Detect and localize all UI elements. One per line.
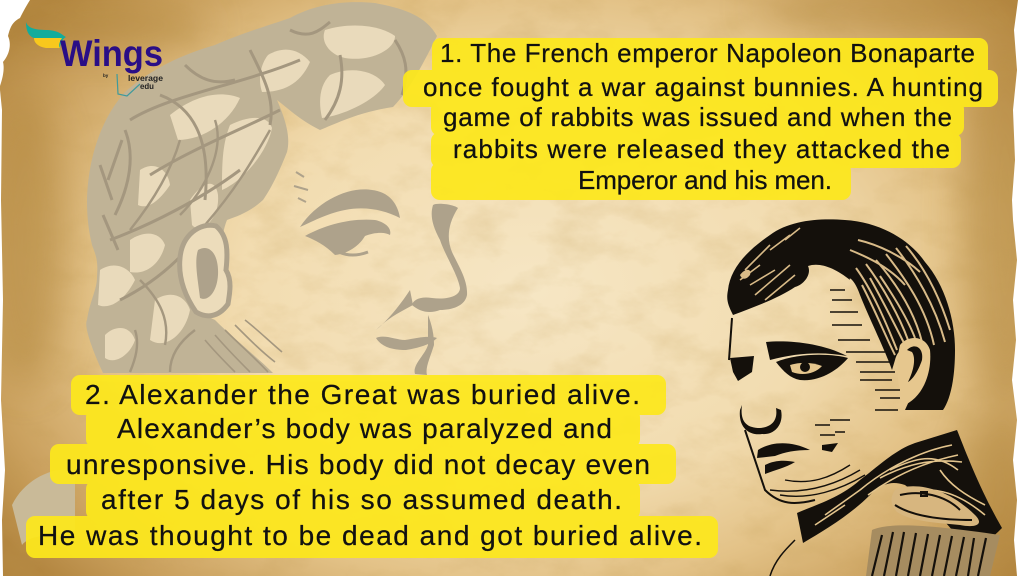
text: fact 2: He was thought to be dead and got buried alive. bbox=[38, 520, 702, 551]
far brow and eye bbox=[730, 356, 754, 381]
hair bbox=[727, 219, 955, 410]
yellow highlight: fact 1 bbox=[403, 38, 998, 200]
text: fact 2: unresponsive. His body did not decay even bbox=[66, 449, 650, 480]
brow bbox=[766, 341, 847, 360]
nose and mouth bbox=[376, 290, 437, 375]
hair and laurel wreath bbox=[86, 2, 437, 373]
nose bbox=[740, 405, 782, 434]
neck strands bbox=[12, 469, 75, 545]
logo: Wings by Leverage Edu bbox=[26, 22, 163, 96]
background portrait: Alexander the Great bbox=[12, 2, 467, 545]
Napoleon engraving bbox=[727, 219, 1002, 576]
forehead hatch bbox=[294, 172, 308, 202]
brow bbox=[300, 189, 400, 227]
text: fact 1: 1. The French emperor Napoleon Bonaparte bbox=[440, 38, 975, 68]
coat bbox=[866, 525, 1000, 576]
face profile bbox=[412, 204, 467, 312]
ear bbox=[898, 338, 930, 405]
face contour bbox=[729, 318, 815, 503]
text: fact 2: after 5 days of his so assumed death. bbox=[101, 484, 622, 515]
text: fact 2: Alexander’s body was paralyzed and bbox=[117, 413, 612, 444]
text: fact 1: once fought a war against bunnies. A hunting bbox=[423, 72, 983, 102]
logo: Wings by Leverage Edu: Wings bbox=[60, 33, 163, 74]
logo: Wings by Leverage Edu: leverage bbox=[128, 73, 163, 83]
text: fact 1: Emperor and his men. bbox=[578, 165, 832, 195]
hair highlights bbox=[740, 228, 950, 355]
collar bbox=[797, 430, 1002, 546]
text: fact 1: rabbits were released they attacked the bbox=[453, 134, 950, 164]
logo: Wings by Leverage Edu: by bbox=[103, 73, 109, 78]
text: fact 1: game of rabbits was issued and when the bbox=[443, 102, 952, 132]
epaulette bbox=[891, 486, 979, 526]
logo: Wings by Leverage Edu: edu bbox=[140, 81, 154, 91]
yellow highlight: fact 2 bbox=[26, 375, 718, 558]
ear bbox=[180, 225, 230, 316]
mouth bbox=[757, 443, 810, 458]
text: fact 2: 2. Alexander the Great was buried alive. bbox=[85, 379, 640, 410]
eye bbox=[305, 220, 390, 255]
